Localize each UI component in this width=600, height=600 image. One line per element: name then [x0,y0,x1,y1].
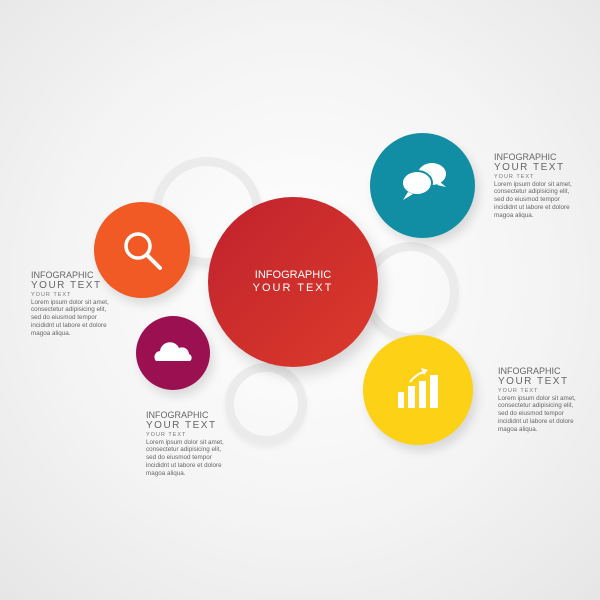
text block: teal: consectetur adipisicing elit, [494,188,569,195]
text block: yellow: INFOGRAPHIC [498,366,561,376]
icon: bar chart [398,368,438,408]
text block: teal: INFOGRAPHIC [494,152,557,162]
circle: orange search [94,202,190,298]
text block: yellow: sed do eiusmod tempor [498,410,564,417]
icon: speech bubbles [403,163,446,200]
text block: bottom: magoa aliqua. [146,470,186,477]
text block: left: incididnt ut labore et dolore [31,322,107,329]
icon: magnifier [124,232,162,270]
text block: yellow [498,366,576,433]
circle: purple cloud [136,316,210,390]
text block: teal: magoa aliqua. [494,212,534,219]
text block: teal: YOUR TEXT [494,162,565,173]
text block: teal: Lorem ipsum dolor sit amet, [494,180,572,188]
text block: left: YOUR TEXT [31,292,71,298]
main label: YOUR TEXT [253,282,333,294]
text block: bottom: INFOGRAPHIC [146,410,209,420]
text block: bottom: YOUR TEXT [146,432,186,438]
text block: left: Lorem ipsum dolor sit amet, [31,298,109,306]
circle: teal chat [370,133,475,238]
ring: right [362,242,459,342]
circle: yellow chart [363,335,473,445]
text block: teal: YOUR TEXT [494,174,534,180]
text block: yellow: consectetur adipisicing elit, [498,402,573,409]
text block: left: sed do eiusmod tempor [31,314,97,321]
text block: yellow: Lorem ipsum dolor sit amet, [498,394,576,402]
text block: left: INFOGRAPHIC [31,270,94,280]
ring: bottom [225,363,307,445]
main label: INFOGRAPHIC [255,269,331,281]
text block: bottom: sed do eiusmod tempor [146,454,212,461]
ring: top [152,157,262,267]
circle: red main [208,197,378,367]
text block: left: magoa aliqua. [31,330,71,337]
text block: teal [494,152,572,219]
text block: left: YOUR TEXT [31,280,102,291]
text block: bottom: Lorem ipsum dolor sit amet, [146,438,224,446]
text block: teal: sed do eiusmod tempor [494,196,560,203]
text block: bottom: YOUR TEXT [146,420,217,431]
text block: yellow: YOUR TEXT [498,376,569,387]
icon: cloud [154,342,192,361]
text block: left: consectetur adipisicing elit, [31,306,106,313]
text block: teal: incididnt ut labore et dolore [494,204,570,211]
text block: bottom: consectetur adipisicing elit, [146,446,221,453]
main label [252,269,333,294]
text block: bottom [146,410,224,477]
text block: bottom: incididnt ut labore et dolore [146,462,222,469]
text block: yellow: magoa aliqua. [498,426,538,433]
text block: yellow: YOUR TEXT [498,388,538,394]
text block: yellow: incididnt ut labore et dolore [498,418,574,425]
text block: left [31,270,109,337]
